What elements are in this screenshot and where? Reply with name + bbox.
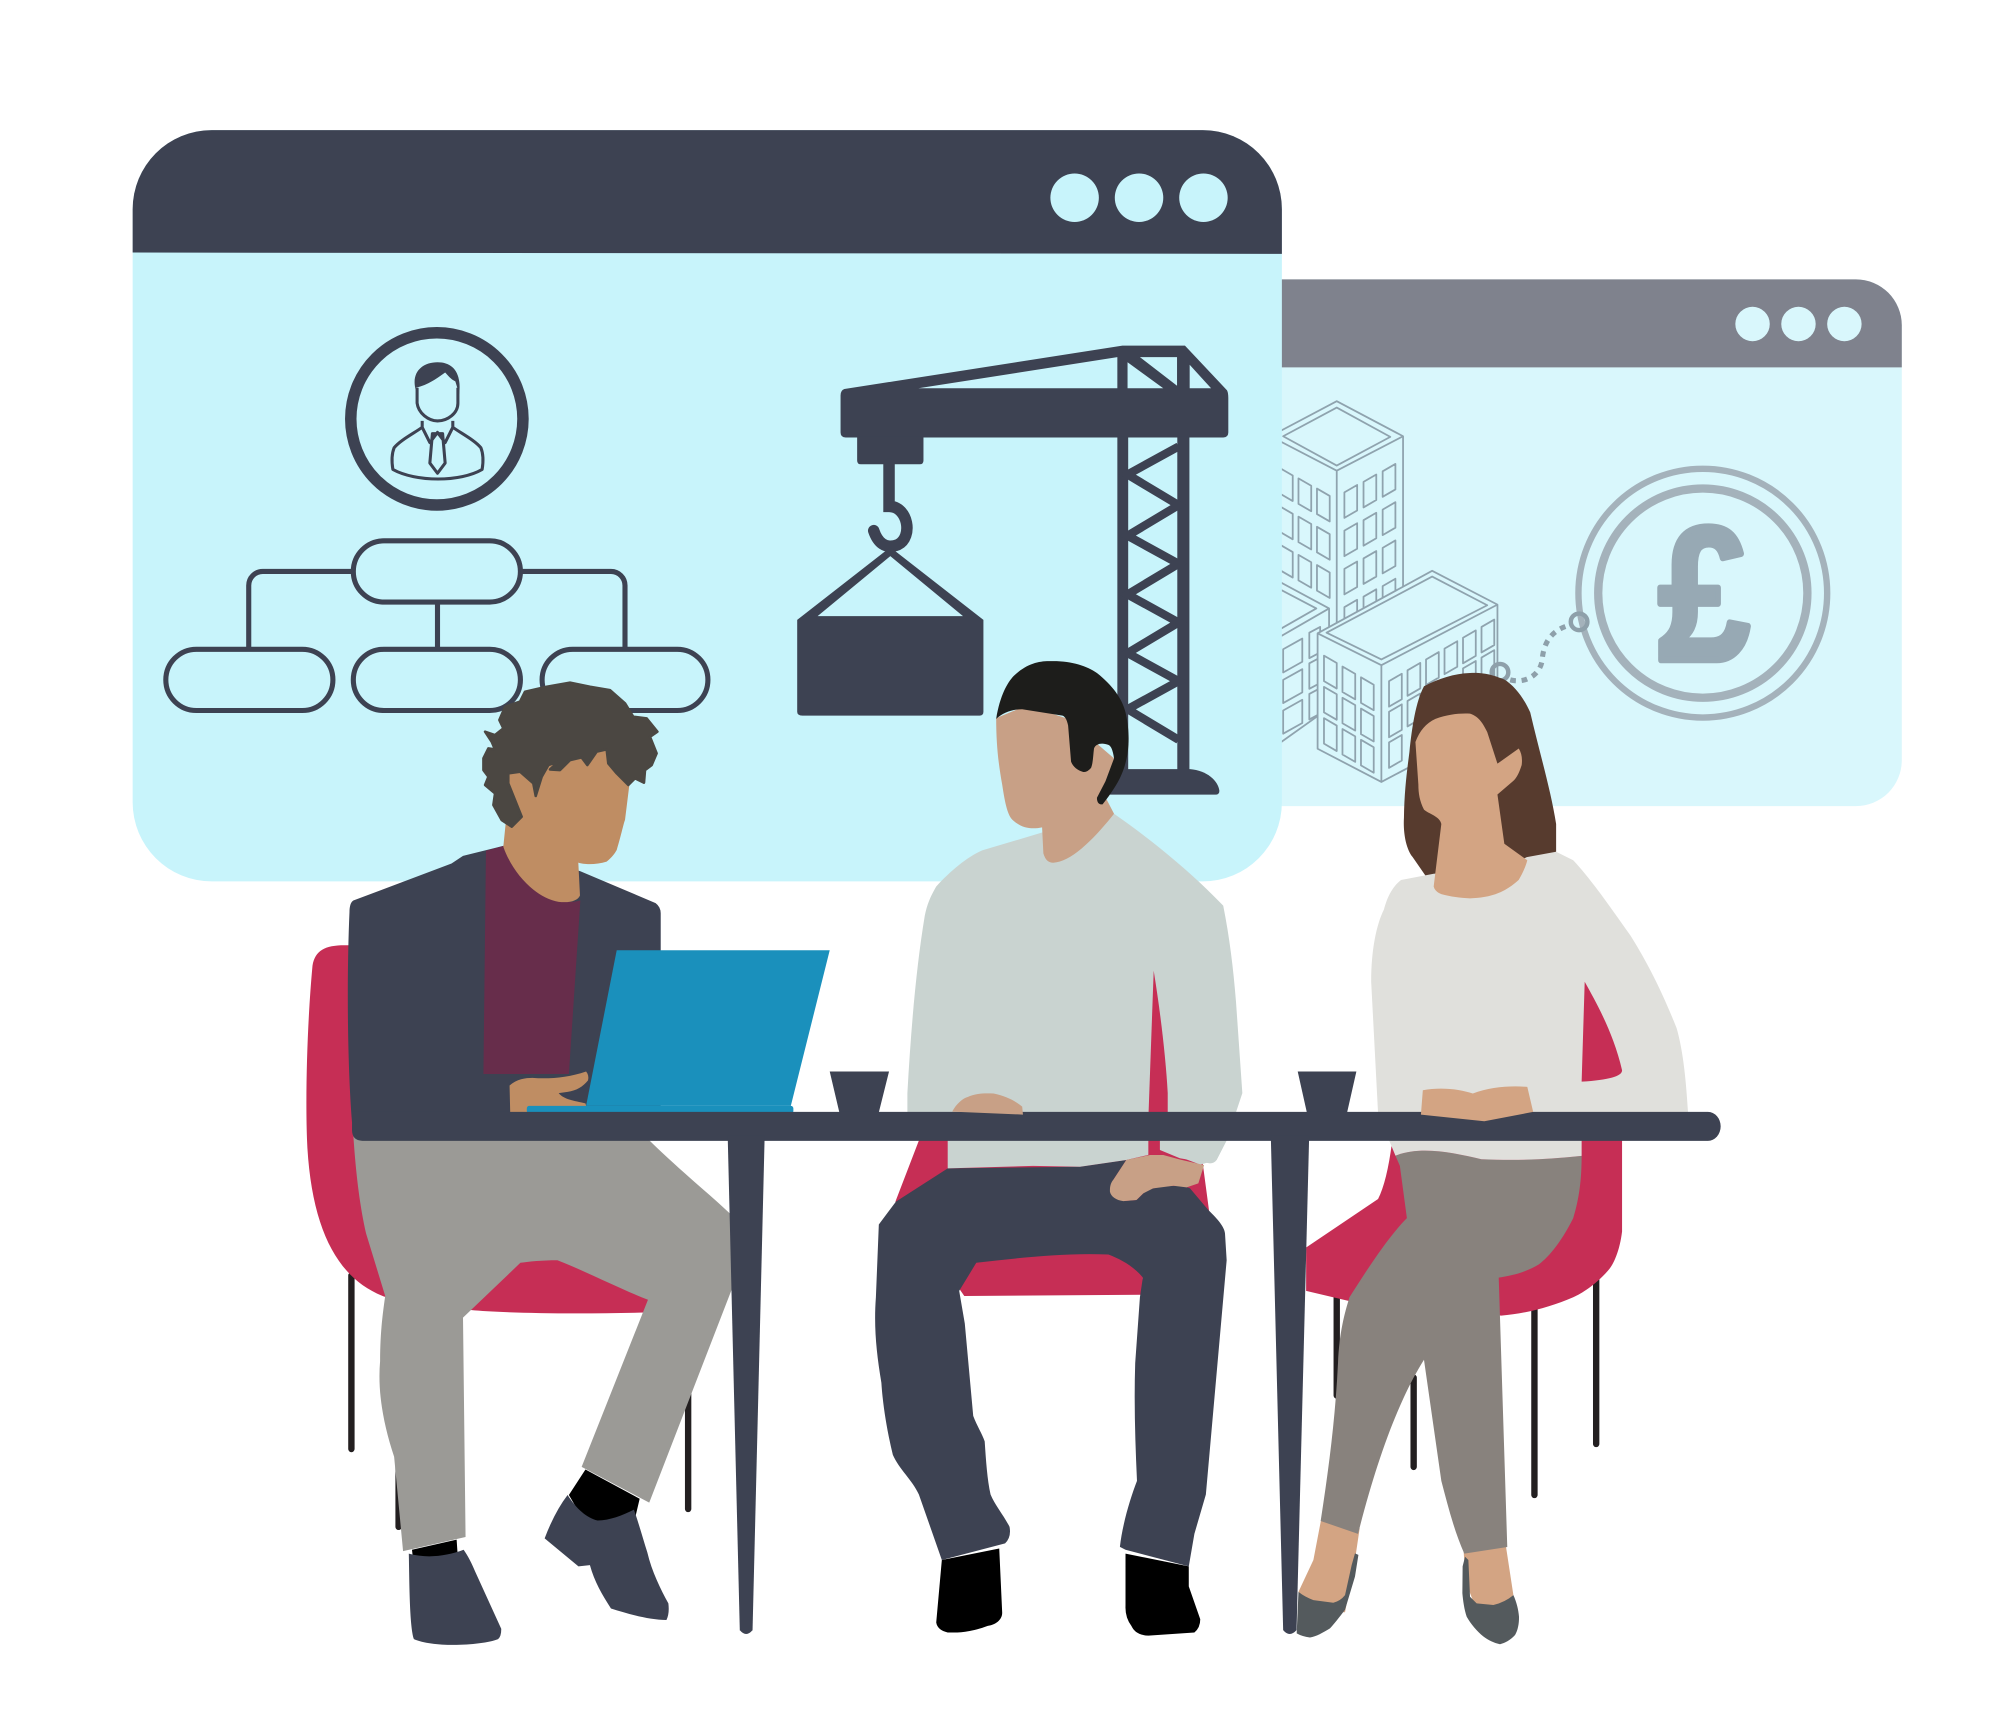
woman trousers [1321,1151,1582,1554]
back window title bar [1250,279,1902,367]
chair gap below table [1148,1135,1160,1155]
left man shoes [409,1495,669,1645]
laptop [527,950,830,1114]
woman left foot [1298,1518,1360,1612]
crane tower [1103,436,1219,795]
icon: pound coin: £ [1658,486,1750,701]
icon: tower crane [797,346,1228,795]
chair legs [351,1276,688,1527]
icon: isometric buildings [1263,401,1497,782]
woman sweater [1371,852,1688,1160]
chart: organisation hierarchy [166,541,708,710]
figure: left man legs and shoes [353,1135,732,1645]
icon: manager portrait [351,333,523,505]
table top [352,1112,1721,1141]
cup: left [830,1071,889,1115]
left man shirt [483,846,580,1074]
main window control dots [1050,173,1228,222]
dotted connector from buildings to coin [1492,614,1587,681]
main window title bar [133,130,1282,254]
left man trousers [353,1135,732,1551]
hand: middle man on knee [1110,1155,1204,1201]
cup: right [1298,1071,1356,1115]
figure: left man chair [306,945,732,1527]
middle man trousers [875,1160,1227,1566]
figure: middle man trousers and shoes [875,1160,1227,1636]
middle man face [996,705,1114,863]
hoist block [857,436,923,464]
panel: main browser window [133,130,1282,881]
woman right foot [1463,1541,1513,1617]
woman face and neck [1415,714,1527,898]
middle man hair [996,661,1129,804]
hanging load [797,547,983,716]
icon: pound coin [1578,469,1827,718]
table leg left [728,1135,765,1634]
left man hand [510,1071,588,1112]
figure: middle man chair [895,1135,1209,1296]
middle man shoes [936,1549,1200,1636]
crane boom [841,346,1228,438]
table [352,1112,1721,1634]
figure: woman trousers and feet [1297,1151,1582,1644]
figure: middle man torso and head [907,661,1242,1201]
table leg right [1271,1135,1309,1634]
sleeve cuff: middle man [1160,1135,1227,1163]
panel: back browser window with finance [1250,279,1902,806]
woman chair legs [1337,1276,1596,1495]
figure: woman chair [1306,1135,1622,1495]
left man head and neck [503,746,629,902]
figure: woman torso and head [1371,673,1688,1160]
figure: left man torso and head [348,683,661,1122]
chair gap beside middle man [1149,971,1168,1112]
middle man sweater [907,814,1242,1168]
woman right shoe [1462,1557,1519,1644]
hand: middle man on table [952,1093,1023,1115]
hook and cable [874,464,907,546]
left man socks [412,1469,640,1561]
woman hair [1404,673,1556,880]
woman left shoe [1297,1553,1358,1637]
hands: woman [1421,1086,1533,1121]
chair gap beside woman [1582,982,1622,1082]
left man jacket [348,846,661,1122]
back window control dots [1735,307,1862,341]
left man curly hair [483,683,657,827]
